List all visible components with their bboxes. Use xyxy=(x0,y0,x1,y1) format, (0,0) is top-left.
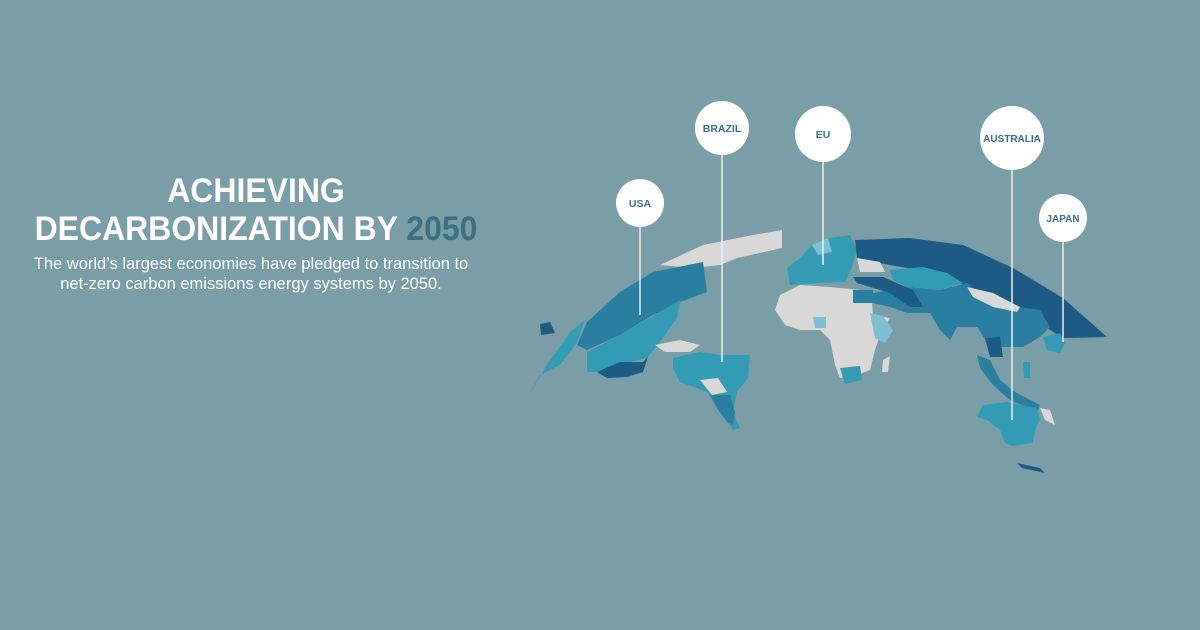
south america xyxy=(673,352,750,430)
alaska strip xyxy=(527,320,585,398)
subtitle: The world’s largest economies have pledged to transition to xyxy=(34,255,468,273)
title: ACHIEVING xyxy=(167,172,345,210)
callout: Brazil: BRAZIL xyxy=(703,123,742,135)
asia xyxy=(873,283,1050,347)
callout: Brazil xyxy=(695,101,749,362)
new zealand xyxy=(1017,463,1045,473)
callout: USA xyxy=(616,179,664,315)
japan xyxy=(1043,333,1065,353)
callout: USA: USA xyxy=(629,198,652,210)
callout: Japan xyxy=(1039,194,1087,342)
alaska island xyxy=(540,322,555,335)
callout: EU xyxy=(795,106,851,265)
title: DECARBONIZATION BY 2050 xyxy=(35,210,477,248)
mexico xyxy=(597,357,648,378)
australia xyxy=(977,402,1040,446)
greenland xyxy=(660,230,782,268)
caribbean xyxy=(655,340,700,352)
russia xyxy=(855,238,1107,338)
callout: Australia: AUSTRALIA xyxy=(983,134,1041,145)
callout: Australia xyxy=(980,106,1044,420)
subtitle xyxy=(34,255,468,293)
se asia xyxy=(977,355,1040,412)
canada xyxy=(577,262,707,350)
callout: Japan: JAPAN xyxy=(1046,214,1080,225)
subtitle: net-zero carbon emissions energy systems by 2050. xyxy=(60,275,442,293)
callout: EU: EU xyxy=(816,129,830,141)
title xyxy=(35,172,477,248)
usa xyxy=(587,300,680,372)
europe xyxy=(787,235,857,285)
africa xyxy=(775,285,890,378)
